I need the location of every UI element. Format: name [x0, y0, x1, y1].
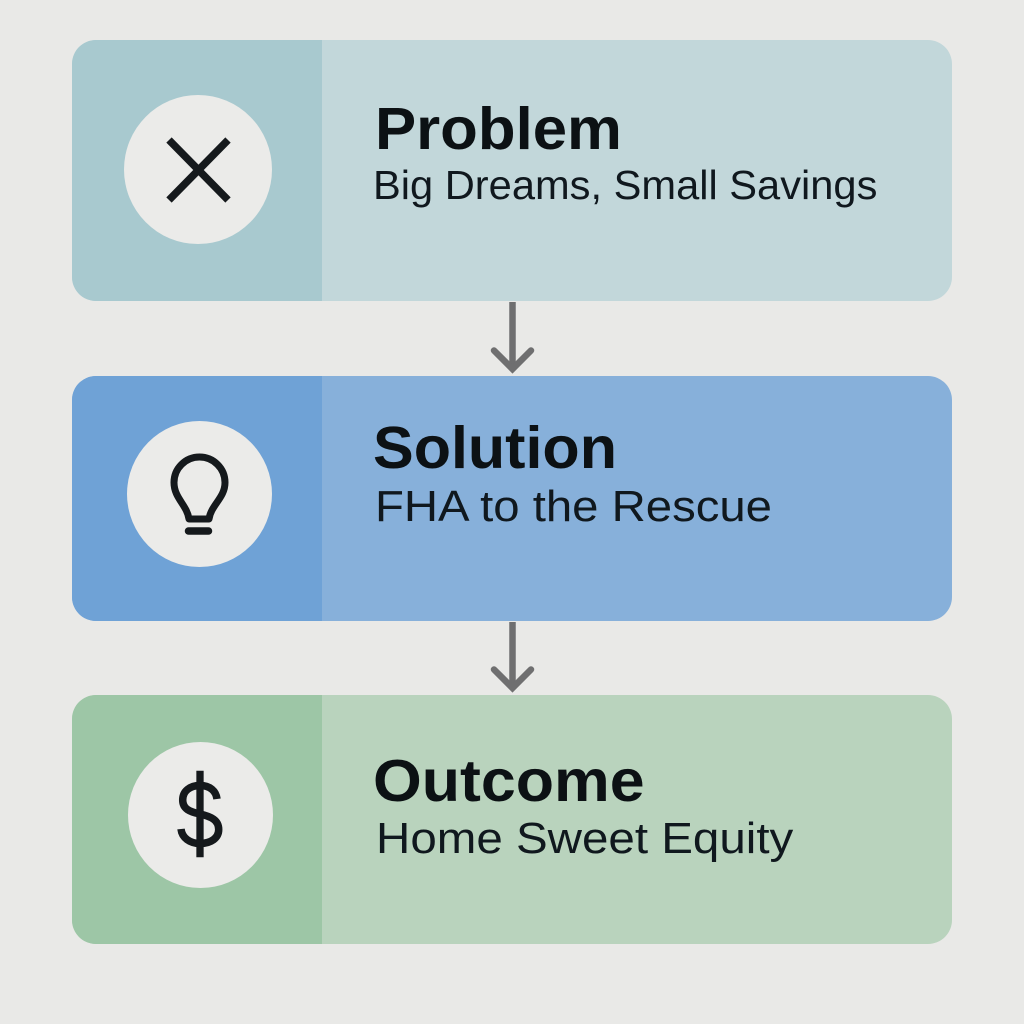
solution icon column — [72, 376, 322, 621]
arrow: problem to solution — [490, 302, 534, 374]
panel: problem — [72, 40, 952, 301]
icon: light bulb — [170, 454, 228, 535]
solution subtitle: FHA to the Rescue — [375, 482, 772, 530]
panel: outcome — [72, 695, 952, 944]
outcome heading: Outcome — [373, 748, 645, 814]
outcome icon circle — [128, 742, 273, 888]
outcome icon column — [72, 695, 322, 944]
icon: X mark — [166, 137, 231, 203]
solution heading: Solution — [373, 415, 617, 481]
icon: dollar sign — [177, 770, 222, 858]
panel: solution — [72, 376, 952, 621]
problem icon column — [72, 40, 322, 301]
problem icon circle — [124, 95, 272, 244]
arrow: solution to outcome — [490, 622, 534, 692]
solution icon circle — [127, 421, 272, 567]
problem subtitle: Big Dreams, Small Savings — [373, 162, 877, 208]
outcome subtitle: Home Sweet Equity — [376, 814, 793, 862]
problem heading: Problem — [375, 96, 622, 162]
